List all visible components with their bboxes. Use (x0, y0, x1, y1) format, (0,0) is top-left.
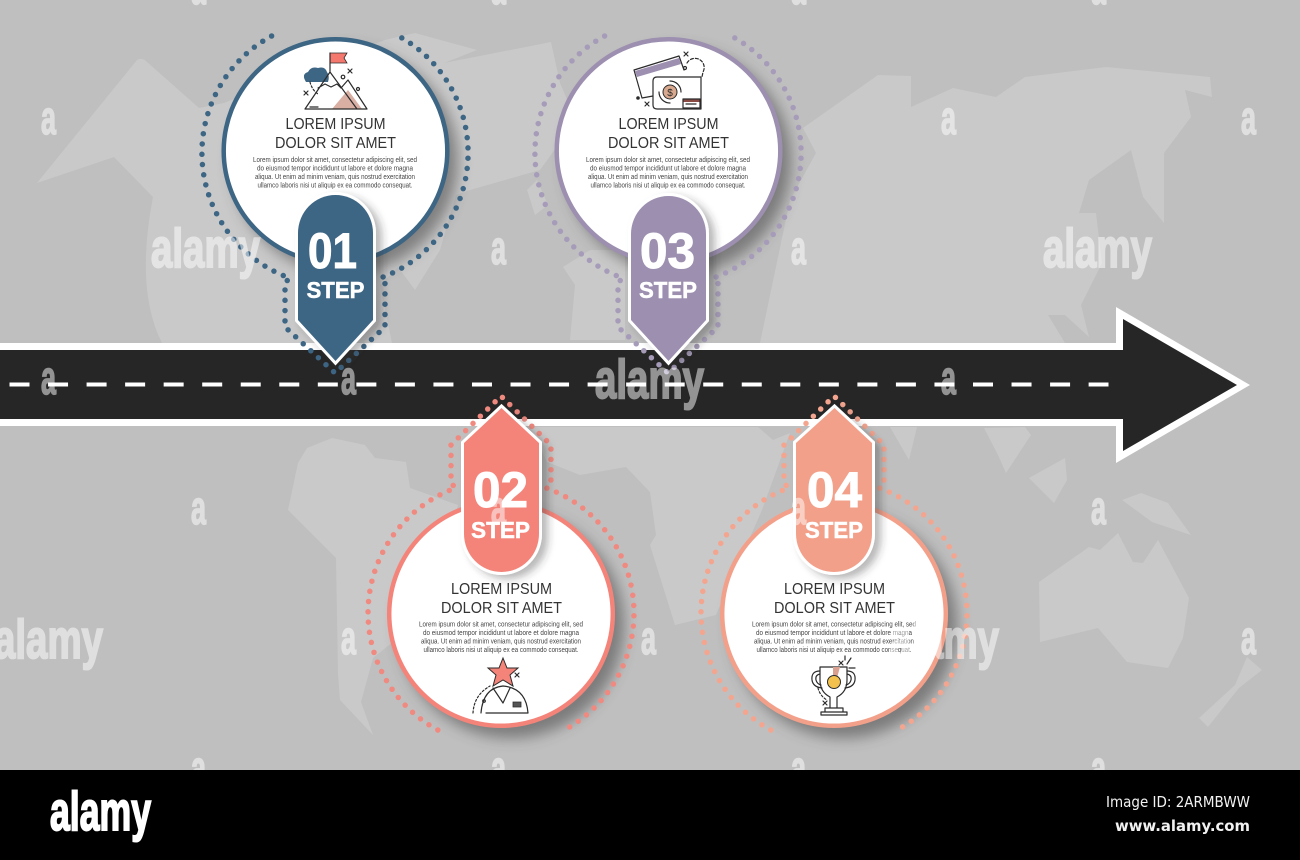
text block: Lorem ipsum dolor sit amet, consectetur adipiscing elit, sed (752, 622, 916, 628)
text block (586, 157, 750, 190)
text block (253, 157, 417, 190)
image id: Image ID: 2ARMBWW (1106, 793, 1250, 811)
step 03 badge: STEP (639, 277, 697, 303)
text block: Lorem ipsum dolor sit amet, consectetur adipiscing elit, sed (586, 157, 750, 164)
step 01 badge: 01 (308, 223, 357, 279)
footer url: www.alamy.com (1115, 817, 1250, 835)
watermarks: a (191, 481, 206, 534)
icon: cards and money (634, 52, 704, 109)
watermarks: a (791, 221, 806, 274)
step 02 card (368, 396, 634, 738)
step 03 badge (631, 196, 706, 361)
watermarks: a (941, 91, 956, 144)
heading: DOLOR SIT AMET (441, 600, 562, 617)
step 02 badge (464, 408, 539, 572)
text block: ullamco laboris nisi ut aliquip ex ea commodo consequat. (590, 182, 746, 190)
icon: employee star (473, 658, 528, 713)
watermarks: alamy (1043, 217, 1152, 279)
heading: LOREM IPSUM (451, 581, 552, 598)
watermarks: a (191, 741, 206, 794)
text block: do eiusmod tempor incididunt ut labore et dolore magna (590, 166, 746, 172)
watermarks: a (341, 351, 356, 404)
watermarks: alamy (890, 608, 999, 670)
text block: do eiusmod tempor incididunt ut labore et dolore magna (257, 166, 413, 172)
text block: do eiusmod tempor incididunt ut labore et dolore magna (423, 630, 579, 637)
heading: LOREM IPSUM (784, 581, 885, 598)
heading: LOREM IPSUM (618, 116, 718, 133)
footer logo: alamy (50, 780, 151, 842)
step 03 card (535, 36, 801, 373)
watermarks: a (491, 221, 506, 274)
watermarks: a (341, 611, 356, 664)
step 01 badge: STEP (306, 277, 364, 303)
step 04 badge: STEP (805, 517, 863, 543)
step 01 card (202, 36, 468, 373)
watermarks: a (491, 741, 506, 794)
text block: ullamco laboris nisi ut aliquip ex ea commodo consequat. (756, 647, 912, 654)
heading: DOLOR SIT AMET (774, 600, 895, 617)
text block: ullamco laboris nisi ut aliquip ex ea commodo consequat. (424, 647, 579, 654)
world map (37, 33, 1262, 735)
step 03 badge: 03 (640, 223, 695, 279)
step 04 card (701, 396, 967, 738)
step 04 badge: 04 (807, 462, 862, 518)
watermarks: a (1091, 741, 1106, 794)
step 01 badge (298, 195, 373, 361)
step 02 badge: STEP (471, 517, 530, 543)
watermarks: a (1091, 481, 1106, 534)
text block: Lorem ipsum dolor sit amet, consectetur adipiscing elit, sed (253, 157, 417, 164)
watermarks: a (1241, 91, 1256, 144)
watermarks: a (941, 351, 956, 404)
watermarks: a (41, 351, 56, 404)
watermarks: a (1241, 611, 1256, 664)
heading: DOLOR SIT AMET (275, 135, 396, 152)
watermarks: a (791, 481, 806, 534)
watermarks: a (791, 741, 806, 794)
text block: aliqua. Ut enim ad minim veniam, quis nostrud exercitation (754, 638, 914, 646)
heading: DOLOR SIT AMET (608, 135, 729, 152)
icon: trophy with medal (812, 656, 855, 715)
heading (275, 116, 396, 152)
watermarks: a (491, 481, 506, 534)
heading (608, 116, 729, 152)
watermarks: a (41, 91, 56, 144)
icon: cards and money: $ (667, 88, 673, 99)
heading: LOREM IPSUM (286, 116, 386, 133)
watermarks: a (641, 611, 656, 664)
text block: aliqua. Ut enim ad minim veniam, quis nostrud exercitation (588, 174, 748, 181)
step 02 badge: 02 (473, 462, 528, 518)
text block: Lorem ipsum dolor sit amet, consectetur adipiscing elit, sed (419, 622, 583, 628)
watermarks: alamy (595, 348, 704, 410)
road arrow (0, 307, 1250, 463)
text block (419, 622, 583, 654)
footer bar (0, 770, 1300, 860)
text block (752, 622, 916, 654)
text block: do eiusmod tempor incididunt ut labore et dolore magna (756, 630, 912, 637)
step 04 badge (796, 408, 872, 572)
text block: aliqua. Ut enim ad minim veniam, quis nostrud exercitation (255, 174, 415, 181)
text block: aliqua. Ut enim ad minim veniam, quis nostrud exercitation (421, 638, 581, 646)
watermarks: alamy (151, 217, 260, 279)
heading (774, 581, 895, 617)
text block: ullamco laboris nisi ut aliquip ex ea commodo consequat. (258, 182, 413, 190)
icon: mountain with flag (304, 53, 367, 109)
heading (441, 581, 562, 617)
